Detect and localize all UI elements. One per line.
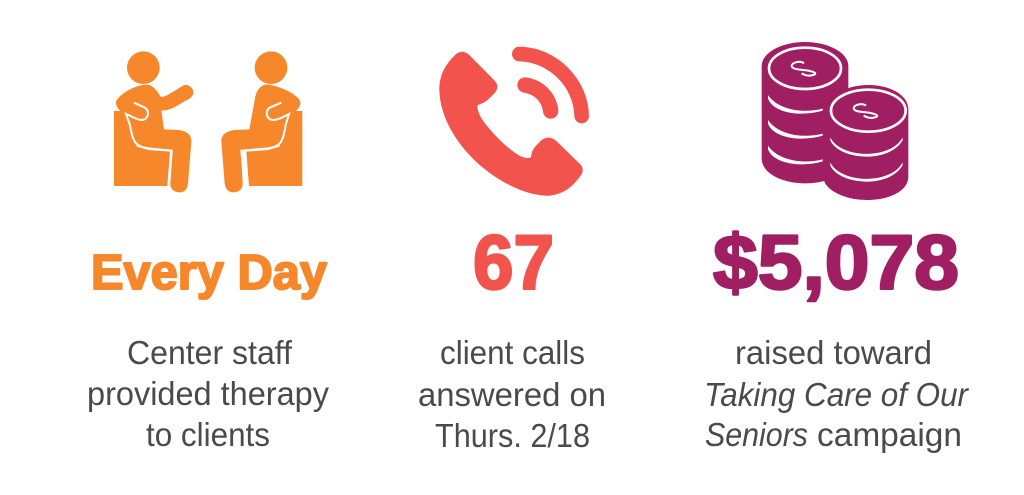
text block: calls description: answered on: [418, 376, 606, 413]
text block: therapy description: Center staff: [127, 334, 293, 371]
figure: 67: 67: [473, 220, 554, 306]
left person and chair: [114, 51, 193, 192]
text block: therapy description: to clients: [146, 416, 270, 453]
text block: therapy description: provided therapy: [87, 375, 329, 412]
left coin stack: [762, 42, 848, 183]
text block: campaign description: raised toward: [735, 334, 932, 371]
text block: therapy description: [87, 334, 329, 453]
panel: therapy: [87, 51, 329, 453]
icon: phone with signal arcs: [439, 52, 583, 196]
panel: client calls: [418, 52, 606, 454]
figure: $5,078: $5,078: [713, 220, 959, 306]
panel: campaign: [704, 42, 970, 453]
text block: campaign description: campaign: [817, 416, 962, 453]
icon: stacks of coins: [762, 42, 908, 200]
text block: calls description: [418, 334, 606, 454]
right person and chair: [221, 51, 302, 192]
icon: two people seated in conversation: [114, 51, 302, 192]
text block: campaign description: Seniors: [705, 416, 808, 453]
text block: calls description: client calls: [440, 334, 585, 371]
right coin stack: [823, 85, 908, 200]
text block: campaign description: Taking Care of Our: [704, 376, 970, 413]
text block: calls description: Thurs. 2/18: [435, 417, 590, 454]
text block: campaign description: [704, 334, 970, 453]
heading: Every Day: Every Day: [91, 246, 327, 300]
